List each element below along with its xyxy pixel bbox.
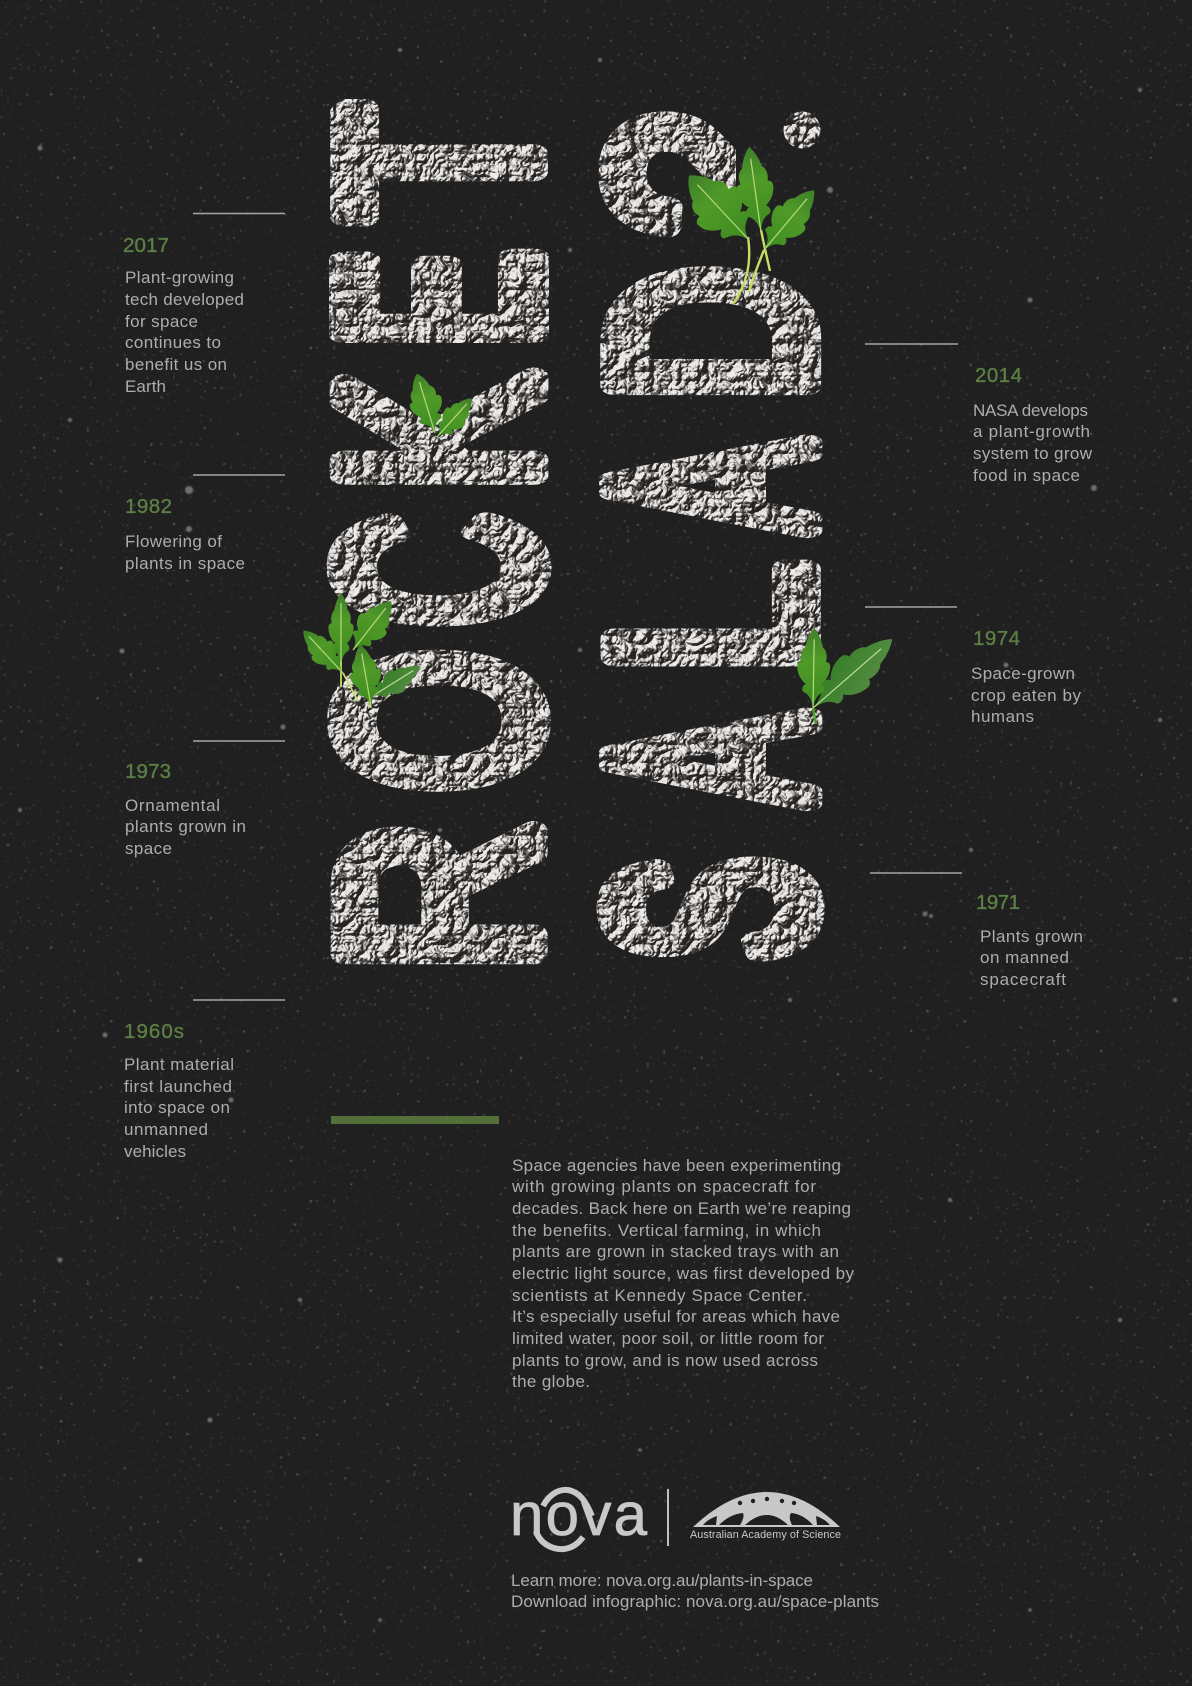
logo: Australian Academy of Science: [690, 1492, 841, 1541]
intro paragraph: scientists at Kennedy Space Center.: [512, 1286, 807, 1305]
year 1973: 1973: [125, 760, 171, 783]
description 1982: plants in space: [125, 554, 245, 573]
title word: SALAD?: [553, 112, 867, 961]
description 1960s: into space on: [124, 1098, 230, 1117]
main title: ROCKET SALAD? in crumpled foil: [326, 99, 824, 964]
year 2017: 2017: [123, 234, 169, 257]
description 1971: Plants grown: [980, 927, 1083, 946]
description 1960s: Plant material: [124, 1055, 234, 1074]
description 2017: tech developed: [125, 290, 244, 309]
timeline entry: 1960s: [124, 1000, 285, 1161]
letter R: R: [284, 822, 593, 971]
description 2014: [973, 401, 1093, 485]
title word: ROCKET: [284, 104, 593, 971]
description 1960s: [124, 1055, 234, 1161]
description 2017: Earth: [125, 377, 166, 396]
year 2014: 2014: [975, 364, 1022, 387]
footer links: Download infographic: nova.org.au/space-plants: [511, 1592, 879, 1611]
description 1974: Space-grown: [971, 664, 1075, 683]
description 2014: a plant-growth: [973, 422, 1090, 441]
question mark: ?: [555, 114, 867, 236]
timeline entry: 1982: [125, 475, 285, 573]
description 1971: on manned: [980, 948, 1069, 967]
footer links: Learn more: nova.org.au/plants-in-space: [511, 1571, 813, 1590]
description 1960s: first launched: [124, 1077, 232, 1096]
intro paragraph: plants to grow, and is now used across: [512, 1351, 818, 1370]
intro paragraph: limited water, poor soil, or little room for: [512, 1329, 824, 1348]
description 1973: space: [125, 839, 172, 858]
dome emblem: [693, 1492, 840, 1527]
description 2017: [125, 268, 244, 396]
year 1982: 1982: [125, 495, 172, 518]
description 2014: food in space: [973, 466, 1080, 485]
intro paragraph: the globe.: [512, 1372, 590, 1391]
logo: nova: nova: [510, 1481, 648, 1548]
intro paragraph: [511, 1156, 854, 1391]
letter C: C: [286, 515, 593, 626]
question mark: [598, 111, 820, 238]
year 1960s: 1960s: [124, 1020, 184, 1043]
rocket leaves on the L: [797, 624, 906, 724]
year 1971: 1971: [976, 891, 1020, 914]
rocket leaves on the O: [294, 591, 427, 709]
intro paragraph: decades. Back here on Earth we’re reaping: [512, 1199, 851, 1218]
description 1982: [125, 532, 245, 573]
intro paragraph: Space agencies have been experimenting: [512, 1156, 841, 1175]
description 2017: for space: [125, 312, 198, 331]
letter E: E: [284, 250, 593, 347]
rocket leaves on the question mark and D: [669, 144, 828, 304]
description 2014: system to grow: [973, 444, 1093, 463]
intro paragraph: the benefits. Vertical farming, in which: [512, 1221, 821, 1240]
letter O: O: [286, 650, 593, 791]
letter L: L: [554, 563, 867, 673]
intro paragraph: with growing plants on spacecraft for: [511, 1177, 816, 1196]
letter T: T: [285, 104, 593, 221]
description 1974: humans: [971, 707, 1034, 726]
timeline entry: 1974: [865, 607, 1082, 726]
footer links: [511, 1571, 879, 1611]
description 1960s: vehicles: [124, 1142, 186, 1161]
description 2017: continues to: [125, 333, 221, 352]
academy wordmark: Australian Academy of Science: [690, 1529, 841, 1541]
description 1974: [971, 664, 1082, 726]
timeline entry: 2014: [865, 344, 1093, 485]
logo divider: [667, 1489, 669, 1546]
timeline entry: 1973: [125, 741, 285, 858]
intro paragraph: electric light source, was first developed by: [512, 1264, 854, 1283]
description 1973: Ornamental: [125, 796, 220, 815]
letter A: A: [553, 715, 867, 804]
description 1973: plants grown in: [125, 817, 246, 836]
green accent bar: [331, 1116, 499, 1124]
letter S: S: [553, 858, 866, 961]
description 1971: [980, 927, 1083, 989]
description 1960s: unmanned: [124, 1120, 208, 1139]
letter A: A: [553, 442, 867, 531]
year 1974: 1974: [973, 627, 1020, 650]
letter D: D: [555, 267, 867, 401]
description 2017: Plant-growing: [125, 268, 234, 287]
description 1971: spacecraft: [980, 970, 1066, 989]
letter K: K: [284, 375, 593, 490]
intro paragraph: It’s especially useful for areas which have: [512, 1307, 840, 1326]
description 1974: crop eaten by: [971, 686, 1082, 705]
intro paragraph: plants are grown in stacked trays with an: [512, 1242, 839, 1261]
description 2017: benefit us on: [125, 355, 227, 374]
timeline entry: 1971: [870, 873, 1083, 989]
timeline entry: 2017: [123, 214, 285, 396]
rocket leaves on the K: [401, 369, 481, 445]
description 1982: Flowering of: [125, 532, 222, 551]
description 2014: NASA develops: [973, 401, 1088, 420]
description 1973: [125, 796, 246, 858]
